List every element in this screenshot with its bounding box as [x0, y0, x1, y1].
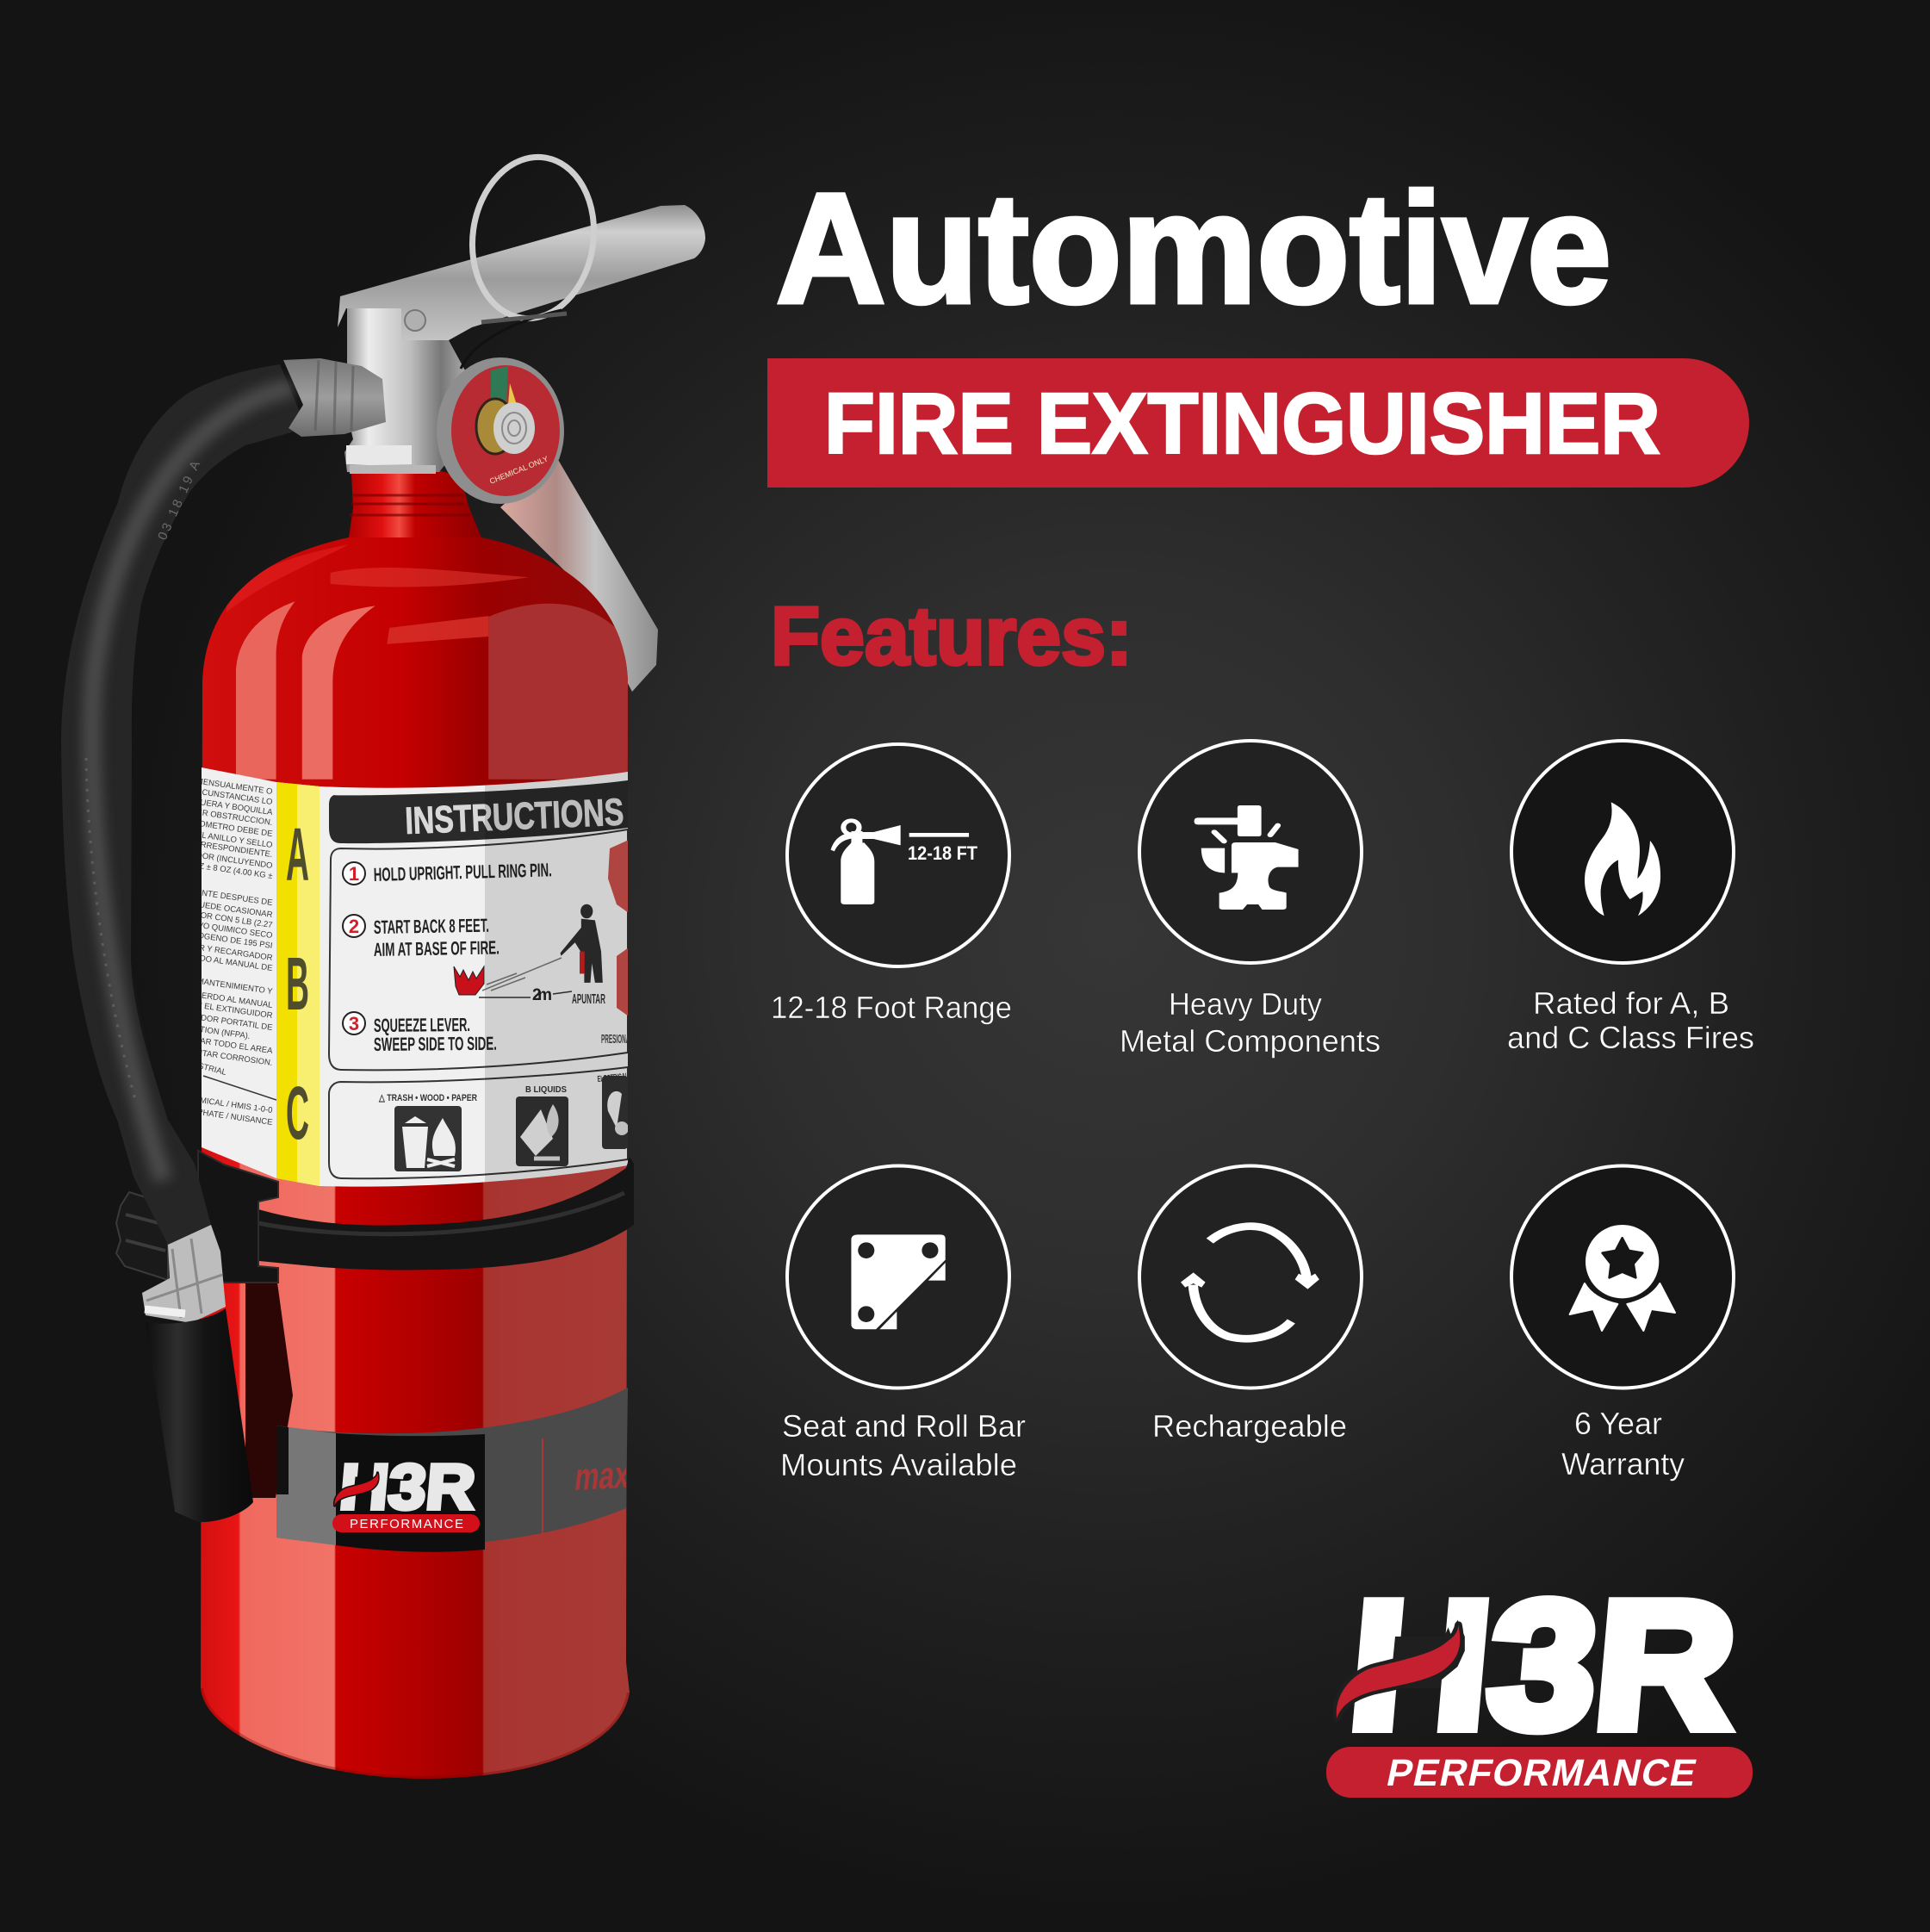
pressure gauge — [437, 357, 564, 504]
fire class box: ELECTRICAL — [597, 1072, 629, 1084]
label: fire classes: Rated for A, B — [1533, 985, 1729, 1021]
fire extinguisher illustration — [61, 149, 705, 1783]
spanish instructions text: EL EXTINGUIDOR CON 5 LB (2.27 — [144, 903, 273, 930]
cylinder neck — [349, 468, 481, 537]
band logo: H3R — [337, 1451, 478, 1523]
feature: mounts — [787, 1166, 1009, 1388]
cylinder body — [198, 534, 633, 1783]
band secondary brand: maxO — [573, 1452, 654, 1499]
step 2: AIM AT BASE OF FIRE. — [374, 936, 500, 960]
spanish instructions text: DE ACUERDO AL MANUAL DE — [158, 947, 273, 973]
step 2 — [343, 915, 500, 960]
upper hose crimp — [283, 358, 386, 437]
label: mounts: Seat and Roll Bar — [782, 1408, 1026, 1444]
bottom brand band — [276, 1388, 654, 1552]
step 2: 2 — [349, 916, 359, 937]
spanish instructions text: PHOSPHATE / NUISANCE — [174, 1104, 273, 1128]
rear lever — [500, 458, 658, 692]
label: mounts: Mounts Available — [780, 1447, 1017, 1482]
yellow ABC strip: A — [286, 813, 309, 897]
icon: award ribbon — [1570, 1225, 1675, 1331]
spanish instructions text: INSPECCION, MANTENIMIENTO Y — [141, 969, 274, 997]
ring pin — [461, 149, 604, 369]
logo performance pill: PERFORMANCE — [1383, 1752, 1700, 1794]
spanish instructions text: DRY CHEMICAL / HMIS 1-0-0 — [163, 1090, 273, 1115]
feature: range — [787, 744, 1009, 966]
label: fire classes: and C Class Fires — [1507, 1020, 1754, 1055]
hose date print: 03 18 19 A — [155, 457, 204, 543]
step 1 — [343, 859, 552, 885]
yellow ABC strip — [276, 762, 320, 1193]
label: warranty: 6 Year — [1574, 1406, 1662, 1441]
step 2: START BACK 8 FEET. — [374, 915, 489, 938]
class C icon — [602, 1076, 629, 1149]
step 3: 3 — [349, 1013, 359, 1034]
label: warranty — [1561, 1406, 1685, 1482]
label: fire classes — [1507, 985, 1754, 1055]
label: metal components: Metal Components — [1120, 1023, 1381, 1059]
logo flame swoosh — [1337, 1620, 1465, 1718]
step 3: SWEEP SIDE TO SIDE. — [374, 1033, 497, 1055]
instructions heading bar — [329, 780, 628, 843]
label: metal components: Heavy Duty — [1169, 986, 1322, 1022]
spanish instructions text: SUMINISTRADO CON EL EXTINGUIDOR — [119, 990, 273, 1021]
icon: extinguisher with range — [831, 821, 969, 904]
mounting bracket — [198, 1151, 278, 1283]
step 3 — [343, 1012, 497, 1055]
feature: rechargeable — [1139, 1166, 1362, 1388]
fire class box: △ TRASH • WOOD • PAPER — [378, 1093, 477, 1103]
yellow ABC strip: C — [286, 1072, 309, 1155]
instructions heading bar: INSTRUCTIONS — [404, 791, 624, 842]
label: range: 12-18 Foot Range — [771, 990, 1012, 1025]
spanish instructions text: INMEDIATAMENTE LIMPIAR TODO EL AREA — [105, 1023, 274, 1056]
lower crimp — [142, 1225, 226, 1323]
feature: range: 12-18 FT — [908, 842, 978, 864]
step 3: SQUEEZE LEVER. — [374, 1014, 470, 1036]
spanish instructions text: DE ACUERDO AL MANUAL — [171, 987, 273, 1010]
aiming diagram — [454, 840, 634, 1047]
label: rechargeable: Rechargeable — [1152, 1408, 1347, 1444]
logo performance pill — [1326, 1747, 1753, 1798]
spanish instructions text: OPERABLE. EL ANILLO Y SELLO — [147, 823, 273, 850]
aiming diagram: 2m — [532, 986, 552, 1004]
nozzle shadow on cylinder — [245, 1283, 293, 1498]
spanish instructions text: UNA PARCIAL PUEDE OCASIONAR — [138, 891, 273, 920]
features heading: Features: — [771, 590, 1133, 682]
spanish instructions text: DE EXTINGUIDOR PORTATIL DE — [148, 1006, 273, 1033]
icon: mounting bracket — [851, 1234, 946, 1329]
spanish instructions text: DISTRIBUIDOR Y RECARGADOR — [146, 936, 273, 963]
label: metal components — [1120, 986, 1381, 1059]
hose — [61, 364, 307, 1245]
spanish instructions text: REVISE LA MANGUERA Y BOQUILLA — [132, 788, 274, 817]
feature: fire classes — [1511, 741, 1734, 963]
spanish instructions text: QUIMICO PARA EVITAR CORROSION. — [127, 1039, 273, 1068]
band logo: PERFORMANCE — [350, 1517, 463, 1531]
spanish instructions text: EXTINGUIDOR (INCLUYENDO — [158, 845, 273, 871]
spanish instructions text: DESPUES DE LAS CIRCUNSTANCIAS LO — [115, 776, 273, 807]
subtitle banner: FIRE EXTINGUISHER — [824, 376, 1660, 472]
spanish instructions text: 8.13 OZ ± 8 OZ (4.00 KG ± — [174, 858, 273, 881]
spanish instructions text: DE CUALQUIER OBSTRUCCION. — [146, 801, 273, 828]
feature: metal components — [1139, 741, 1362, 963]
label reflections — [485, 762, 631, 1193]
spanish instructions text: ABC POLVO QUIMICO SECO — [163, 916, 273, 941]
label: mounts — [780, 1408, 1026, 1482]
spanish instructions text — [202, 779, 276, 1125]
top handle lever — [338, 205, 705, 340]
valve body — [344, 305, 465, 474]
subtitle banner — [767, 358, 1749, 488]
spanish instructions text: ASSOCIATION (NFPA). — [164, 1020, 251, 1041]
step 1: HOLD UPRIGHT. PULL RING PIN. — [373, 859, 552, 885]
instruction steps box — [329, 829, 634, 1070]
nozzle — [146, 1308, 253, 1522]
label: warranty: Warranty — [1561, 1446, 1685, 1482]
icon: circular arrows — [1181, 1227, 1319, 1339]
pressure gauge: CHEMICAL ONLY — [488, 454, 549, 486]
class B icon — [516, 1096, 568, 1166]
instruction label — [202, 767, 628, 1187]
class A icon — [394, 1106, 462, 1171]
aiming diagram: APUNTAR — [572, 992, 605, 1007]
icon: anvil and hammer — [1195, 805, 1299, 910]
fire extinguisher illustration: PRESIONAR — [601, 1032, 634, 1047]
feature: warranty — [1511, 1166, 1734, 1388]
yellow ABC strip: B — [286, 942, 309, 1026]
hose clip — [116, 1192, 168, 1280]
step 1: 1 — [349, 863, 359, 885]
icon: flame — [1585, 802, 1660, 916]
spanish instructions text: POSICION CORRESPONDIENTE. — [146, 833, 273, 860]
title: Automotive — [776, 160, 1611, 336]
spanish instructions text: INSPECCIONAR MENSUALMENTE O — [132, 767, 273, 797]
fire class box — [329, 1067, 629, 1178]
spanish instructions text: INDUSTRIAL — [177, 1057, 227, 1078]
spanish instructions text: EL MANOMETRO DEBE DE — [169, 815, 273, 839]
mounting strap — [251, 1157, 634, 1270]
logo wordmark: H3R — [1343, 1564, 1744, 1766]
fire class box: B LIQUIDS — [525, 1085, 567, 1095]
spanish instructions text: GAS DE NITROGENO DE 195 PSI — [146, 923, 273, 951]
brand logo — [1326, 1564, 1753, 1798]
logo crossbar knockout — [1390, 1637, 1445, 1688]
spanish instructions text: INMEDIATAMENTE DESPUES DE — [146, 881, 273, 908]
